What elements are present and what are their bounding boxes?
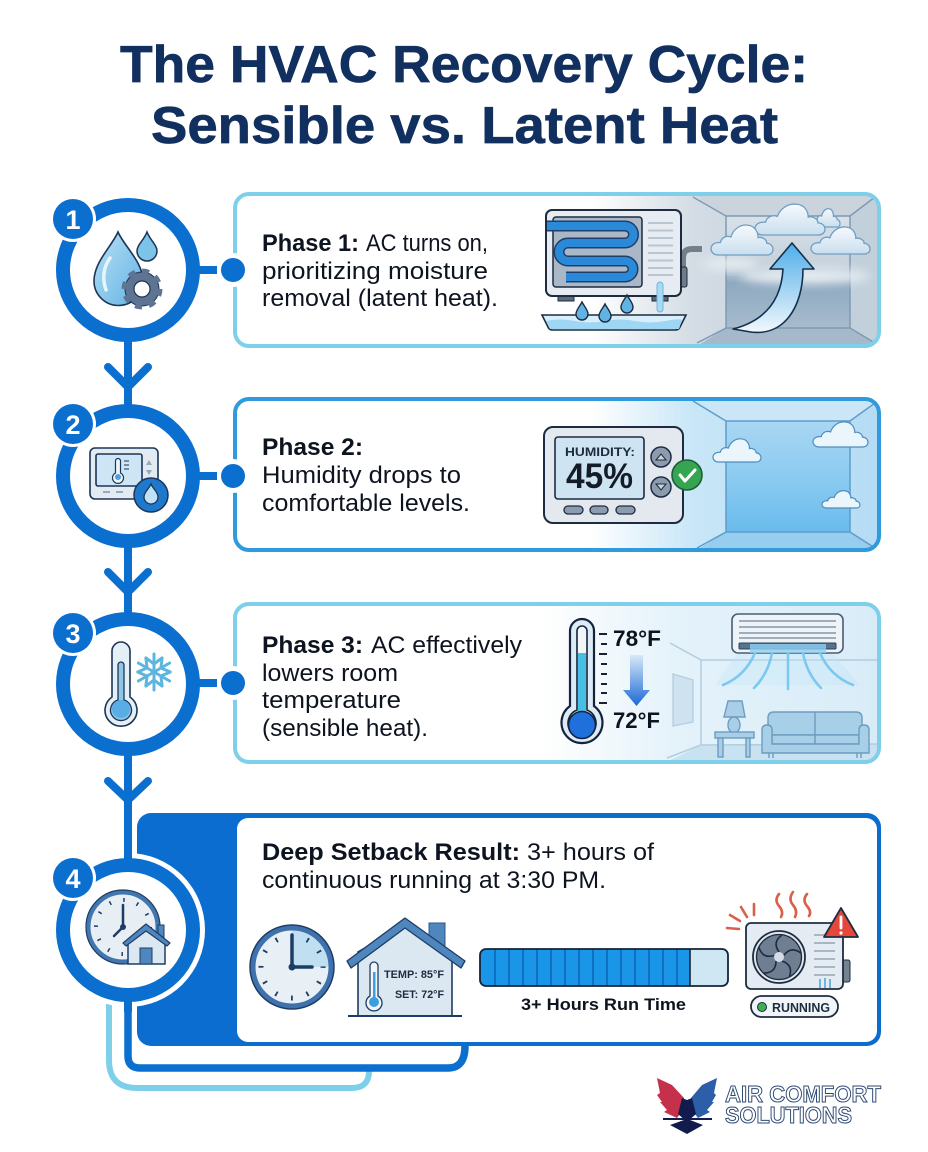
connector arrow: phase 1 to 2 [108,340,148,405]
illustration: dry room [590,399,880,550]
text: phase 3: AC effectively [371,632,522,659]
illustration: humid room [609,196,877,344]
text: phase 2: Phase 2: [262,434,363,461]
text: phase 2: comfortable levels. [262,490,470,517]
icon: humidity display thermostat [544,427,683,523]
text: phase 1: removal (latent heat). [262,285,498,312]
arrow: temperature falling [623,655,650,706]
step 1 link and dot [198,253,250,287]
logo: wordmark: AIR COMFORT [725,1081,881,1107]
text: phase 1: Phase 1: [262,230,359,257]
step 4 circle [51,813,205,1012]
label: run time: 3+ Hours Run Time [521,995,686,1014]
logo: wordmark [725,1081,881,1128]
icon: drip pan with drops [542,295,686,330]
card border [235,399,879,550]
status pill: running: RUNNING [772,1001,830,1015]
text: phase 1 [262,230,498,312]
arrow: rising moisture [733,243,814,332]
connector arrow: phase 2 to 3 [108,546,148,614]
text: phase 1: prioritizing moisture [262,258,488,285]
panel: phase 1 [235,194,880,346]
icon: running outdoor unit [746,923,850,989]
step 3 circle [63,619,193,749]
icon: humidity display thermostat: HUMIDITY: [565,445,635,459]
clouds [713,422,868,508]
icon: house with temperature readout [347,918,465,1016]
text: deep setback result: 3+ hours of [527,839,654,866]
step 1 circle [63,205,193,335]
step 3 link and dot [198,666,250,700]
icon: heat waves [727,892,810,929]
step 3 badge [50,610,96,656]
title [120,36,808,155]
icon: thermometer 78 to 72 [562,619,607,743]
icon: green check [672,460,702,490]
run time progress bar [480,949,728,986]
status pill: running [751,996,838,1017]
panel: phase 2 [235,399,880,550]
step 2 badge [50,401,96,447]
icon: house with temperature readout: SET: 72°F [395,989,444,1001]
icon: wall air conditioner [723,614,853,689]
text: phase 3: (sensible heat). [262,715,428,742]
step 3 badge: 3 [65,619,81,649]
icon: lamp and table [715,701,754,757]
step 2 circle [63,411,193,541]
logo: wordmark: SOLUTIONS [725,1102,852,1128]
step 1 badge [50,196,96,242]
icon: house with temperature readout: TEMP: 85°F [384,969,444,981]
return line: light [109,1000,369,1088]
text: phase 3 [262,632,522,742]
step 1 badge: 1 [65,205,81,235]
text: phase 1: AC turns on, [366,230,488,257]
step 4 badge [50,855,96,901]
text: phase 2: Humidity drops to [262,462,461,489]
step 2 badge: 2 [65,410,81,440]
logo: eagle [657,1078,717,1134]
illustration: cooled living room [581,606,877,760]
return line: dark [128,1000,465,1068]
card border [235,604,879,762]
text: deep setback result: Deep Setback Result: [262,839,520,866]
step 4 badge: 4 [65,864,81,894]
label: 78 F: 78°F [613,626,661,651]
text: phase 3: lowers room [262,660,398,687]
icon: thermostat with drop [90,448,168,512]
connector arrow: phase 3 to 4 [108,753,148,860]
panel: deep setback result [137,813,881,1046]
label: 72 F: 72°F [613,708,660,733]
icon: humidity display thermostat: 45% [566,457,633,496]
title: Sensible vs. Latent Heat [151,97,778,155]
text: phase 2 [262,434,470,517]
panel: phase 3 [235,604,880,762]
icon: sofa [762,712,869,758]
text: deep setback result: continuous running at 3:30 PM. [262,867,606,894]
card border [235,194,879,346]
icon: thermometer and snowflake [105,642,174,726]
title: The HVAC Recovery Cycle: [120,36,808,94]
icon: clock and house [86,890,170,964]
text: phase 3: Phase 3: [262,632,363,659]
icon: clock at 3 PM [250,925,334,1009]
text: phase 3: temperature [262,687,401,714]
icon: warning triangle [824,908,858,937]
icon: water drops and gear [94,232,160,307]
clouds [711,204,870,255]
step 2 link and dot [198,459,250,493]
text: deep setback result [262,839,654,894]
logo: Air Comfort Solutions [657,1078,881,1134]
icon: outdoor AC coil unit [546,210,702,312]
